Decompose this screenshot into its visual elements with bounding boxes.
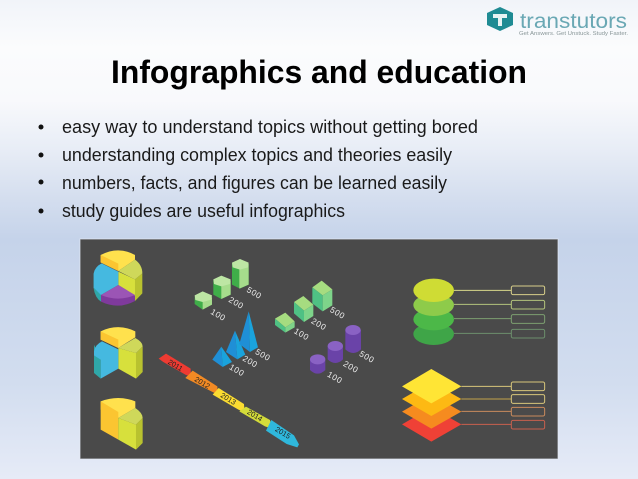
cylinder 200 xyxy=(328,341,343,363)
label 500: 500 xyxy=(328,304,347,321)
stacked ellipses with labels xyxy=(413,279,545,345)
stacked diamonds with labels xyxy=(402,369,545,442)
label 500: 500 xyxy=(254,346,272,363)
layer 2 xyxy=(402,382,545,416)
cylinder 500 xyxy=(345,325,361,353)
hexagon bar chart xyxy=(195,259,264,323)
logo tagline: Get Answers. Get Unstuck. Study Faster. xyxy=(519,31,628,37)
title: Infographics and education xyxy=(111,54,527,90)
cone 200 xyxy=(226,331,245,359)
bullet 1: easy way to understand topics without getting bored xyxy=(62,117,478,137)
timeline ribbon xyxy=(159,354,272,429)
cube 200 xyxy=(294,296,313,322)
ribbon 2014: 2014 xyxy=(246,407,264,423)
right part of panel xyxy=(402,279,545,442)
label 500: 500 xyxy=(358,348,376,365)
pie chart 2: three segments xyxy=(94,327,143,379)
left part of panel xyxy=(94,259,272,450)
ribbon 2012: 2012 xyxy=(193,375,212,391)
cone bar chart xyxy=(212,311,272,378)
logo: transtutors xyxy=(487,7,628,37)
cone 500 xyxy=(239,311,258,352)
cube 500 xyxy=(312,281,332,311)
layer 1 xyxy=(402,369,545,403)
logo wordmark: transtutors xyxy=(520,10,627,33)
bullet 2: understanding complex topics and theories easily xyxy=(62,145,452,165)
cube 100 xyxy=(275,313,295,333)
cone 100 xyxy=(212,347,232,367)
ribbon 2015 xyxy=(266,420,299,447)
cylinder 100 xyxy=(310,354,325,374)
label 100: 100 xyxy=(292,326,311,342)
layer 4 xyxy=(413,323,545,345)
bullet 3: numbers, facts, and figures can be learned easily xyxy=(62,173,447,193)
label 200: 200 xyxy=(241,353,260,370)
layer 4 xyxy=(402,407,545,442)
pie chart 1: four segments xyxy=(94,250,142,306)
bullet list xyxy=(38,117,478,221)
bar 100 xyxy=(195,291,212,310)
label 200: 200 xyxy=(227,294,246,311)
label 200: 200 xyxy=(342,358,360,375)
middle part of panel xyxy=(266,281,376,447)
label 500: 500 xyxy=(245,284,264,301)
icon: logo hexagon xyxy=(487,7,513,31)
ribbon 2015: 2015 xyxy=(274,425,292,441)
ribbon 2011: 2011 xyxy=(166,357,184,373)
label 100: 100 xyxy=(326,369,344,386)
label 100: 100 xyxy=(228,362,246,378)
cube bar chart xyxy=(275,281,347,342)
cylinder bar chart xyxy=(310,325,376,386)
layer 3 xyxy=(402,395,545,429)
bullet 4: study guides are useful infographics xyxy=(62,201,345,221)
bar 500 xyxy=(232,259,249,289)
label 100: 100 xyxy=(209,306,228,323)
dark infographic panel xyxy=(80,239,558,459)
layer 1 xyxy=(413,279,545,302)
layer 2 xyxy=(413,294,545,316)
ribbon 2013: 2013 xyxy=(219,391,238,407)
label 200: 200 xyxy=(310,316,328,332)
pie chart 3: two segments xyxy=(101,398,143,450)
layer 3 xyxy=(413,308,545,330)
bar 200 xyxy=(213,276,231,299)
